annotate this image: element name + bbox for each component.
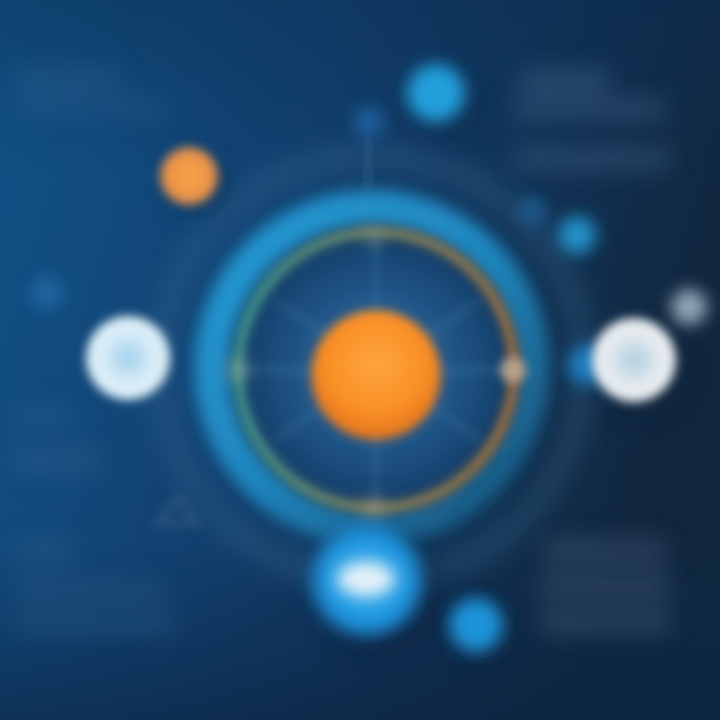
ring junction right bbox=[500, 357, 526, 383]
node: right white bbox=[568, 318, 686, 414]
text block: middle left bbox=[12, 405, 102, 475]
node: far right grey bbox=[671, 289, 707, 325]
node: bottom small blue bbox=[449, 598, 514, 664]
text block: bottom left bbox=[15, 540, 175, 632]
node: left small blue bbox=[30, 276, 64, 310]
icon: faint triangle bbox=[158, 497, 196, 523]
outer blue ring bbox=[212, 208, 532, 528]
faint outer orbit bbox=[160, 156, 584, 580]
text block: top right bbox=[515, 70, 670, 168]
text block: bottom right bbox=[540, 540, 670, 632]
inner disc bbox=[242, 236, 510, 504]
node: orange bbox=[160, 147, 226, 214]
ring junction bottom bbox=[363, 497, 385, 519]
node: top blue bbox=[407, 64, 480, 136]
node: bottom large blue bbox=[311, 524, 440, 655]
central orange sphere bbox=[311, 310, 441, 440]
node: left white bbox=[86, 316, 170, 400]
node: right small dark blue bbox=[518, 197, 546, 225]
ring junction left bbox=[227, 359, 249, 381]
connector: top node to ring bbox=[365, 130, 371, 200]
node: right blue bbox=[558, 216, 596, 254]
ring junction top bbox=[365, 229, 383, 247]
node: top small dark blue bbox=[353, 106, 385, 138]
orbit diagram bbox=[212, 208, 532, 528]
spokes bbox=[235, 235, 520, 510]
orange ring bbox=[238, 232, 514, 508]
text block: top left bbox=[15, 68, 165, 116]
